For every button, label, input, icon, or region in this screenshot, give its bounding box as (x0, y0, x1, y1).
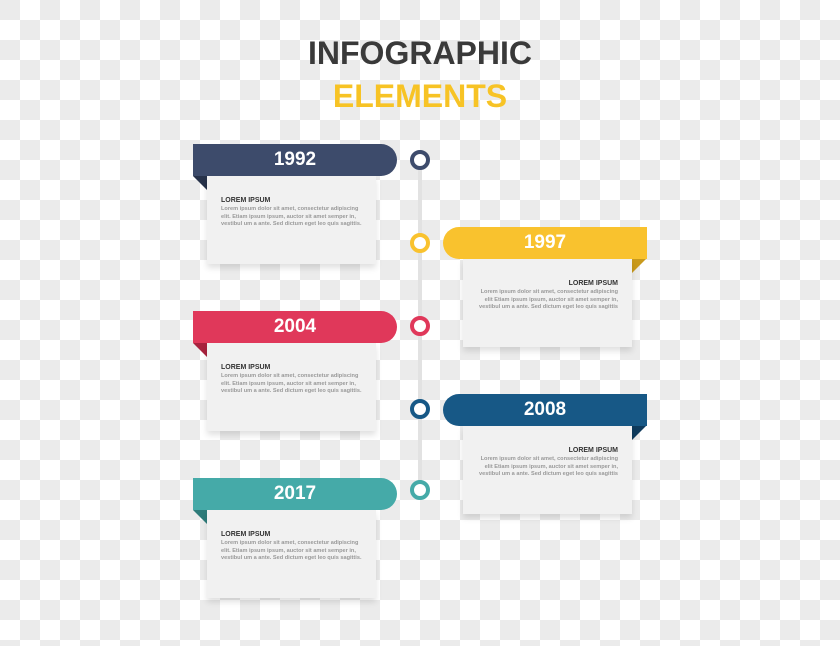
card: LOREM IPSUM (221, 364, 270, 371)
fold (193, 176, 207, 190)
dot 1992 (410, 150, 430, 170)
panel: 2004 (193, 311, 397, 437)
card: Lorem ipsum dolor sit amet, consectetur adipiscing elit. Etiam ipsum ipsum, auctor sit amet semper in, vestibul um a ante. Sed dictum eget leo quis sagittis. (221, 373, 362, 394)
fold (193, 343, 207, 357)
fold (193, 510, 207, 524)
ribbon: 2017 (274, 483, 316, 504)
card: LOREM IPSUM (569, 447, 618, 454)
fold (632, 426, 646, 440)
ribbon: 1992 (274, 149, 316, 170)
panel: 2008 (443, 394, 647, 520)
title: INFOGRAPHIC (308, 35, 532, 71)
card (207, 343, 376, 431)
card: LOREM IPSUM (221, 197, 270, 204)
ribbon: 2004 (274, 316, 316, 337)
panel: 2017 (193, 478, 397, 604)
card: Lorem ipsum dolor sit amet, consectetur adipiscing elit. Etiam ipsum ipsum, auctor sit amet semper in, vestibul um a ante. Sed dictum eget leo quis sagittis. (221, 540, 362, 561)
card (207, 510, 376, 598)
dot 2004 (410, 316, 430, 336)
ribbon: 1997 (524, 232, 566, 253)
fold (632, 259, 646, 273)
card (463, 259, 632, 347)
card: LOREM IPSUM (221, 531, 270, 538)
card: LOREM IPSUM (569, 280, 618, 287)
panel: 1992 (193, 144, 397, 270)
card (207, 176, 376, 264)
subtitle: ELEMENTS (333, 78, 507, 114)
ribbon (443, 227, 647, 259)
card: Lorem ipsum dolor sit amet, consectetur adipiscing elit Etiam ipsum ipsum, auctor sit amet semper in, vestibul um a ante. Sed dictum eget leo quis sagittis (479, 456, 618, 477)
ribbon (193, 144, 397, 176)
dot 1997 (410, 233, 430, 253)
card: Lorem ipsum dolor sit amet, consectetur adipiscing elit Etiam ipsum ipsum, auctor sit amet semper in, vestibul um a ante. Sed dictum eget leo quis sagittis (479, 289, 618, 310)
ribbon (193, 478, 397, 510)
ribbon (443, 394, 647, 426)
ribbon (193, 311, 397, 343)
ribbon: 2008 (524, 399, 566, 420)
card (463, 426, 632, 514)
card: Lorem ipsum dolor sit amet, consectetur adipiscing elit. Etiam ipsum ipsum, auctor sit amet semper in, vestibul um a ante. Sed dictum eget leo quis sagittis. (221, 206, 362, 227)
dot 2008 (410, 399, 430, 419)
timeline line (418, 160, 422, 490)
panel: 1997 (443, 227, 647, 353)
dot 2017 (410, 480, 430, 500)
